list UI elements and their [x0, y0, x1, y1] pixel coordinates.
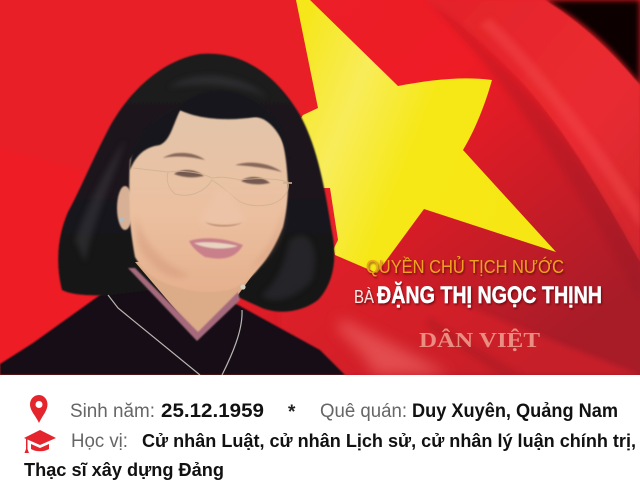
flag corner shadow — [545, 0, 640, 85]
panel: waving flag background — [0, 0, 640, 375]
icon: location pin — [30, 395, 48, 423]
icon: graduation cap — [24, 430, 56, 453]
birth date — [70, 401, 264, 422]
birth date: Sinh năm: — [70, 401, 155, 422]
academic degree: Học vị: — [71, 431, 128, 452]
collar lining — [128, 268, 240, 341]
title: name — [354, 281, 602, 309]
honorific: BÀ — [354, 287, 374, 307]
icon: yellow star — [280, 0, 556, 273]
academic degree: Cử nhân Luật, cử nhân Lịch sử, cử nhân lý luận chính trị, — [142, 431, 636, 451]
hair — [58, 54, 334, 312]
title: office: QUYỀN CHỦ TỊCH NƯỚC — [366, 256, 564, 277]
black áo dài body — [0, 289, 346, 375]
cheek shading — [137, 214, 287, 276]
panel: white info strip — [0, 375, 640, 480]
eyebrows — [163, 153, 282, 172]
face — [129, 110, 288, 292]
lower flag fold — [307, 278, 634, 375]
flag fold highlight band — [425, 0, 640, 262]
glasses — [133, 168, 292, 206]
academic degree — [24, 431, 636, 480]
necklace — [108, 295, 242, 375]
ear and earring — [117, 186, 246, 290]
neck — [135, 262, 262, 336]
hometown: Quê quán: — [320, 401, 407, 422]
birth date: 25.12.1959 — [161, 401, 264, 422]
eyes — [174, 170, 270, 184]
hometown — [320, 401, 618, 422]
separator asterisk: * — [288, 402, 296, 423]
hometown: Duy Xuyên, Quảng Nam — [412, 401, 618, 422]
bangs — [129, 108, 286, 170]
academic degree: Thạc sĩ xây dựng Đảng — [24, 460, 224, 480]
mouth — [189, 238, 243, 259]
nose — [224, 188, 234, 197]
logo: Dân Việt watermark: DÂN VIỆT — [419, 328, 540, 352]
hair sheen — [75, 76, 268, 262]
portrait of Đặng Thị Ngọc Thịnh — [0, 54, 345, 375]
